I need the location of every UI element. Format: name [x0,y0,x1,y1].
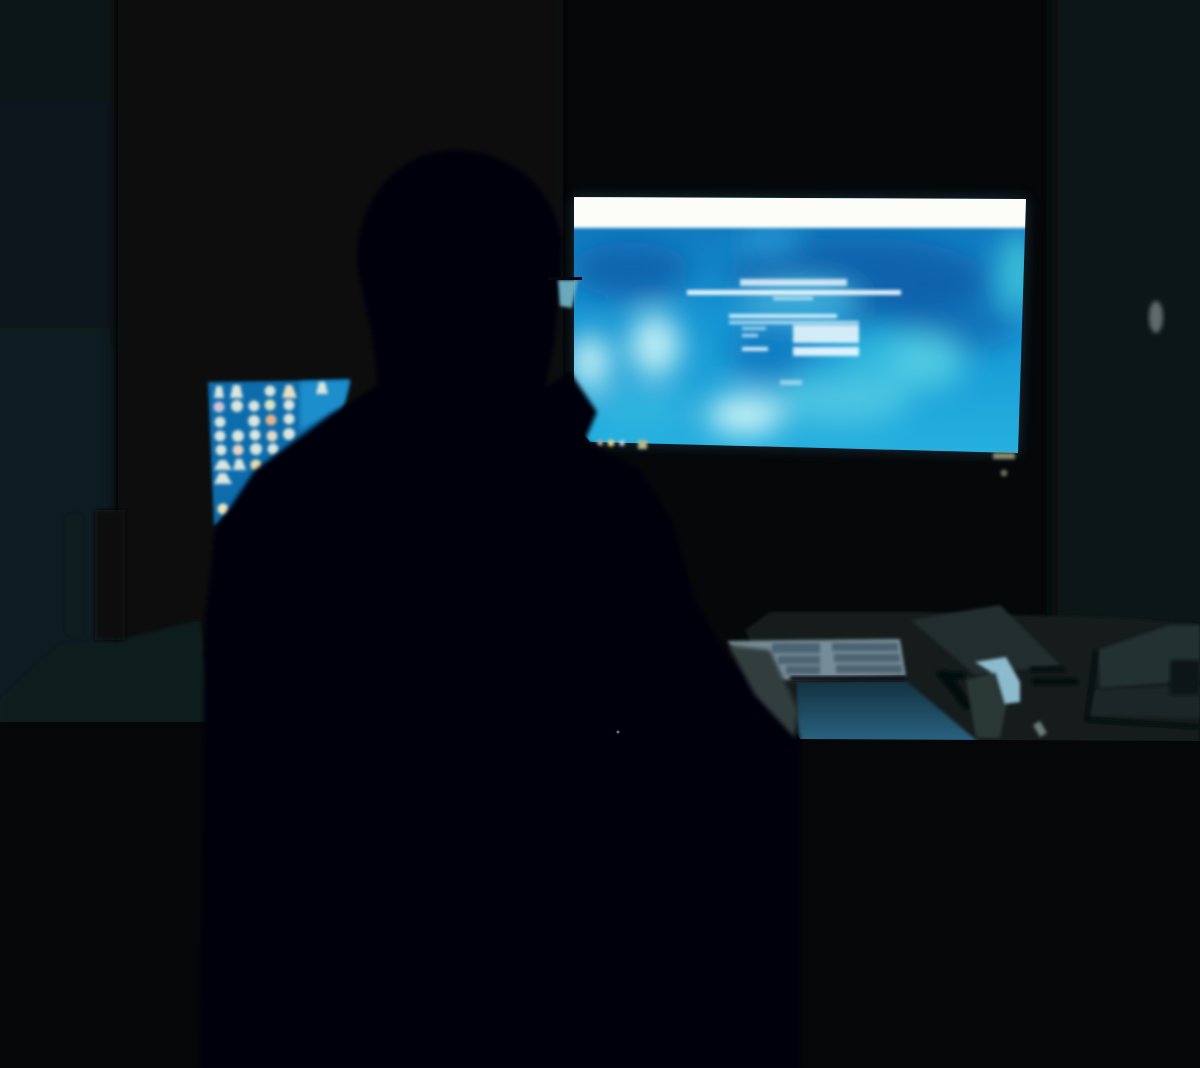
person silhouette [200,150,800,1068]
main monitor [570,195,1030,476]
crumpled wrapper [966,657,1047,738]
desk reflection [797,680,982,745]
screen wallpaper [570,195,1030,460]
glasses lens [558,280,578,308]
notebook [911,605,1060,675]
taskbar icons [597,440,1015,476]
dark cables [935,667,1078,710]
desktop icons [214,382,328,514]
browser bar [570,195,1030,228]
foreground chair back / dark ledge [0,722,1200,1068]
glasses frame [548,277,582,280]
login form text [687,279,901,385]
keyboard [727,639,906,681]
desk surface [727,605,1200,745]
laptop screen [208,380,350,526]
photo scene: person at dark desk with monitors [0,0,1200,741]
phone hand shadow [616,730,620,734]
stacked papers [1087,625,1200,727]
hand on keyboard [728,645,798,738]
wall light on right [1149,301,1163,333]
left wall shelf and objects [0,510,215,730]
